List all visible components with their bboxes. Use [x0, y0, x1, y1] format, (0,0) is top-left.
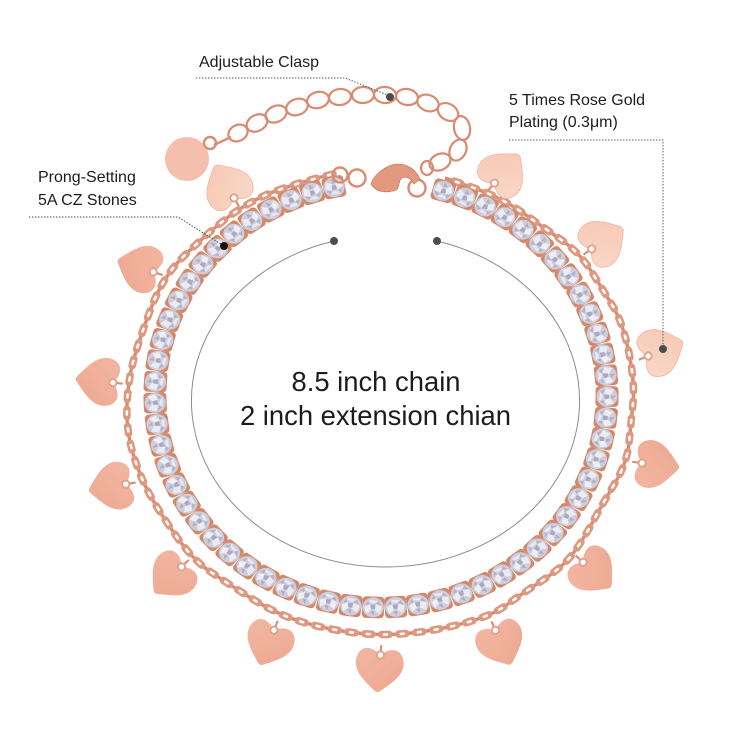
callout: prong-setting stones: 5A CZ Stones: [38, 192, 137, 209]
cable chain: [127, 174, 634, 634]
callout: rose gold plating: 5 Times Rose Gold: [509, 92, 645, 109]
callout: adjustable clasp: [196, 54, 394, 101]
center size text: 2 inch extension chian: [240, 400, 511, 431]
callout: adjustable clasp: Adjustable Clasp: [199, 54, 319, 71]
callout: rose gold plating: [509, 92, 667, 353]
circular measurement line: [191, 237, 580, 567]
center size text: [240, 366, 511, 431]
callout: rose gold plating: Plating (0.3μm): [509, 114, 618, 131]
lobster clasp: [332, 164, 426, 196]
extension chain: [225, 86, 472, 175]
tennis chain of CZ stones: [32, 169, 722, 734]
center size text: 8.5 inch chain: [291, 366, 461, 397]
round end charm: [165, 137, 231, 181]
callout: prong-setting stones: Prong-Setting: [38, 169, 136, 186]
heart charms: [73, 139, 692, 694]
callout: prong-setting stones: [29, 169, 228, 250]
